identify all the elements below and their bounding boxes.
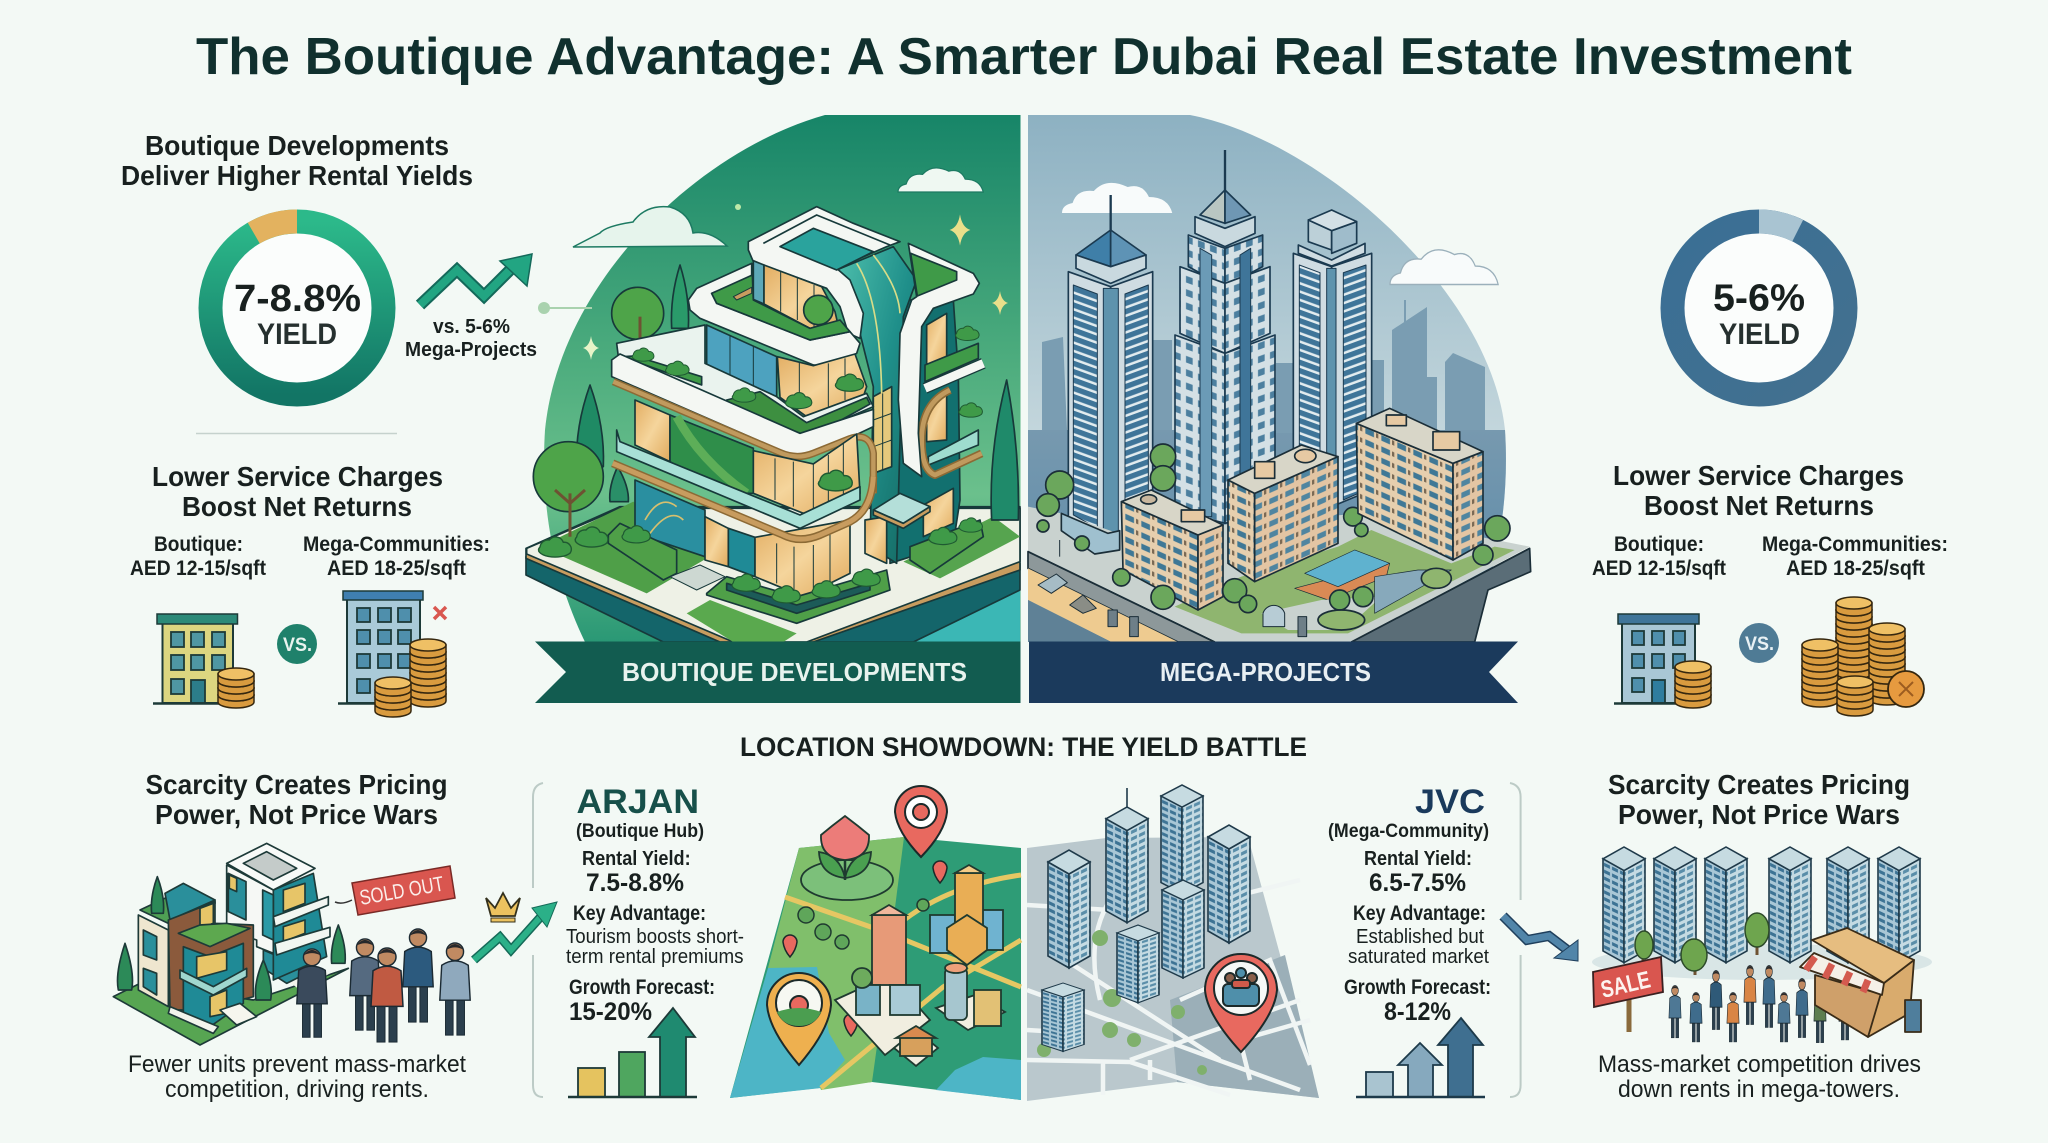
icon: vs badge: VS. [1745, 634, 1774, 655]
heading: Scarcity Creates Pricing [146, 769, 448, 800]
connector [538, 302, 592, 314]
heading [1608, 769, 1910, 830]
map base [730, 837, 1021, 1100]
right band [922, 363, 983, 475]
map shaded block [1170, 955, 1319, 1098]
flower park [801, 816, 893, 900]
heading [152, 461, 443, 522]
heading: Scarcity Creates Pricing [1608, 769, 1910, 800]
bracket: jvc [1510, 783, 1521, 1097]
chart: jvc growth [1356, 1018, 1485, 1097]
pin: gold sun [767, 973, 831, 1065]
caption [128, 1051, 466, 1103]
sky details [573, 168, 1008, 360]
rear wing [890, 300, 982, 563]
heading: higher rental yields: Boutique Developments [145, 130, 449, 161]
arjan name: ARJAN [576, 783, 699, 821]
green dome [544, 115, 1020, 642]
arrow: falling [1503, 916, 1578, 961]
comparison label [405, 316, 537, 361]
heading: Lower Service Charges [152, 461, 443, 492]
bracket: arjan [533, 783, 543, 1097]
map base [1027, 837, 1319, 1101]
market stall [1800, 928, 1921, 1037]
map roads [1027, 880, 1310, 1095]
jvc details: 6.5-7.5% [1369, 869, 1466, 897]
charge labels: AED 18-25/sqft [327, 557, 466, 580]
icon: boutique building with coins [153, 614, 254, 708]
panel: mega yield donut: YIELD [1719, 318, 1800, 351]
third level terrace [688, 263, 860, 367]
jvc details [1328, 821, 1491, 1026]
lawn and pool [1175, 530, 1515, 633]
panel: mega yield donut: 5-6% [1713, 278, 1805, 320]
pin: red target [895, 786, 947, 857]
heading: Power, Not Price Wars [155, 799, 438, 830]
caption: competition, driving rents. [165, 1076, 429, 1103]
heading [146, 769, 448, 830]
blue dome [1028, 115, 1506, 642]
tag: sold out: SOLD OUT [358, 872, 446, 910]
jvc details: 8-12% [1384, 998, 1451, 1026]
clouds [1062, 183, 1498, 284]
caption: Fewer units prevent mass-market [128, 1051, 466, 1078]
heading: Boost Net Returns [182, 491, 412, 522]
heading: higher rental yields: Deliver Higher Rental Yields [121, 160, 473, 191]
charge labels: AED 18-25/sqft [1786, 557, 1925, 580]
arrow: rising trend [420, 254, 532, 305]
arjan details: 7.5-8.8% [586, 869, 684, 897]
charge labels [1592, 533, 1948, 580]
charge labels: AED 12-15/sqft [130, 557, 266, 580]
back trees [1037, 444, 1362, 526]
heading: Power, Not Price Wars [1618, 799, 1900, 830]
donut: 7-8.8% yield: 7-8.8% [234, 278, 361, 320]
charge labels [130, 533, 490, 580]
illustration: boutique buildings [113, 843, 348, 1045]
boutique building on island [526, 207, 1020, 642]
arjan details: Tourism boosts short- [566, 926, 744, 948]
map greenery [1037, 916, 1249, 1075]
ground floor [635, 480, 930, 597]
crowd [1669, 966, 1851, 1043]
chart: arjan growth [568, 1008, 697, 1097]
central column [837, 247, 917, 563]
jvc details: Rental Yield: [1364, 848, 1472, 870]
panel: boutique yield [121, 130, 537, 394]
caption [1598, 1051, 1921, 1103]
charge labels: Boutique: [154, 533, 243, 556]
icon: vs badge: VS. [283, 635, 312, 656]
first level glass band [613, 430, 873, 539]
arrow: rising [474, 902, 557, 960]
heading: higher rental yields [121, 130, 473, 191]
title: The Boutique Advantage: A Smarter Dubai Real Estate Investment [196, 28, 1852, 86]
jvc details: Key Advantage: [1353, 902, 1486, 925]
arjan details: 15-20% [569, 998, 652, 1026]
apartments [1121, 408, 1483, 610]
tag: sold out [335, 866, 455, 915]
jvc details: Established but [1356, 926, 1484, 948]
donut: 7-8.8% yield: YIELD [257, 318, 337, 351]
panel: mega price wars [1592, 769, 1932, 1103]
sign: sale: SALE [1598, 966, 1653, 1004]
tower B [1175, 150, 1275, 523]
arjan details: Growth Forecast: [569, 976, 715, 999]
panel: boutique service charges [130, 461, 490, 717]
heading [1613, 460, 1904, 521]
mega ground and apartment blocks [1028, 408, 1531, 642]
charge labels: AED 12-15/sqft [1592, 557, 1726, 580]
banner: boutique developments [535, 642, 1020, 703]
icon: mega building with coins [338, 591, 446, 717]
map towers [1042, 785, 1250, 1051]
panel: jvc stats [1328, 783, 1491, 1097]
icon: crown [486, 893, 520, 922]
top floor [753, 261, 840, 333]
banner: mega-projects: MEGA-PROJECTS [1160, 657, 1371, 687]
jvc details: Growth Forecast: [1344, 976, 1491, 999]
charge labels: Mega-Communities: [1762, 533, 1948, 556]
small pins [783, 861, 947, 1036]
panel: boutique scarcity [113, 769, 557, 1103]
map: jvc [1027, 785, 1319, 1101]
comparison label: vs. 5-6% [433, 316, 510, 338]
tower C [1293, 210, 1372, 507]
charge labels: Mega-Communities: [303, 533, 490, 556]
arjan details: (Boutique Hub) [576, 821, 704, 842]
illustration: buyers group [297, 929, 470, 1042]
second level glass and gold [707, 325, 867, 417]
map green area [768, 837, 904, 1090]
street figures [1038, 540, 1307, 637]
jvc details: (Mega-Community) [1328, 821, 1489, 842]
comparison label: Mega-Projects [405, 339, 537, 361]
arjan details: Key Advantage: [573, 902, 706, 925]
panel: mega service charges [1592, 460, 1948, 716]
banner: boutique developments: BOUTIQUE DEVELOPMENTS [622, 657, 967, 687]
roof frame and sweep [748, 207, 979, 477]
map roads [785, 875, 1021, 1088]
panel: arjan stats [566, 783, 744, 1097]
second level terrace band [612, 325, 873, 493]
illustration: tower row [1592, 847, 1932, 980]
arjan details [566, 821, 744, 1026]
caption: down rents in mega-towers. [1618, 1076, 1900, 1103]
sign: sale [1593, 957, 1663, 1032]
jvc name: JVC [1415, 783, 1485, 821]
hero illustration: mega half [1028, 115, 1531, 642]
section heading: location showdown: LOCATION SHOWDOWN: THE YIELD BATTLE [740, 732, 1307, 762]
caption: Mass-market competition drives [1598, 1051, 1921, 1078]
heading: Lower Service Charges [1613, 460, 1904, 491]
arjan details: Rental Yield: [582, 848, 691, 870]
pin: crowd [1205, 954, 1277, 1052]
heading: Boost Net Returns [1644, 490, 1874, 521]
hero illustration: boutique half [526, 115, 1020, 642]
island base [526, 502, 1020, 642]
icon: vs badge [1739, 623, 1779, 663]
towers [1068, 150, 1372, 540]
front trees [1037, 516, 1510, 630]
map buildings [835, 865, 1005, 1066]
tower A [1068, 195, 1153, 540]
icon: building with few coins [1614, 614, 1711, 708]
charge labels: Boutique: [1614, 533, 1704, 556]
map water [730, 967, 1021, 1100]
map trees [798, 899, 929, 949]
map: arjan [730, 786, 1021, 1100]
icon: large coin stacks [1802, 597, 1924, 716]
trees [1635, 913, 1769, 975]
jvc details: saturated market [1348, 946, 1489, 968]
planters [539, 518, 983, 623]
trees [533, 265, 1019, 537]
icon: vs badge [277, 624, 317, 664]
banner: mega-projects [1029, 642, 1518, 703]
first level interiors [635, 400, 860, 513]
panel: mega yield donut [1672, 222, 1846, 394]
platform [1028, 507, 1531, 642]
donut: 7-8.8% yield [210, 222, 384, 394]
arjan details: term rental premiums [566, 946, 744, 968]
distant skyline [1028, 300, 1518, 642]
